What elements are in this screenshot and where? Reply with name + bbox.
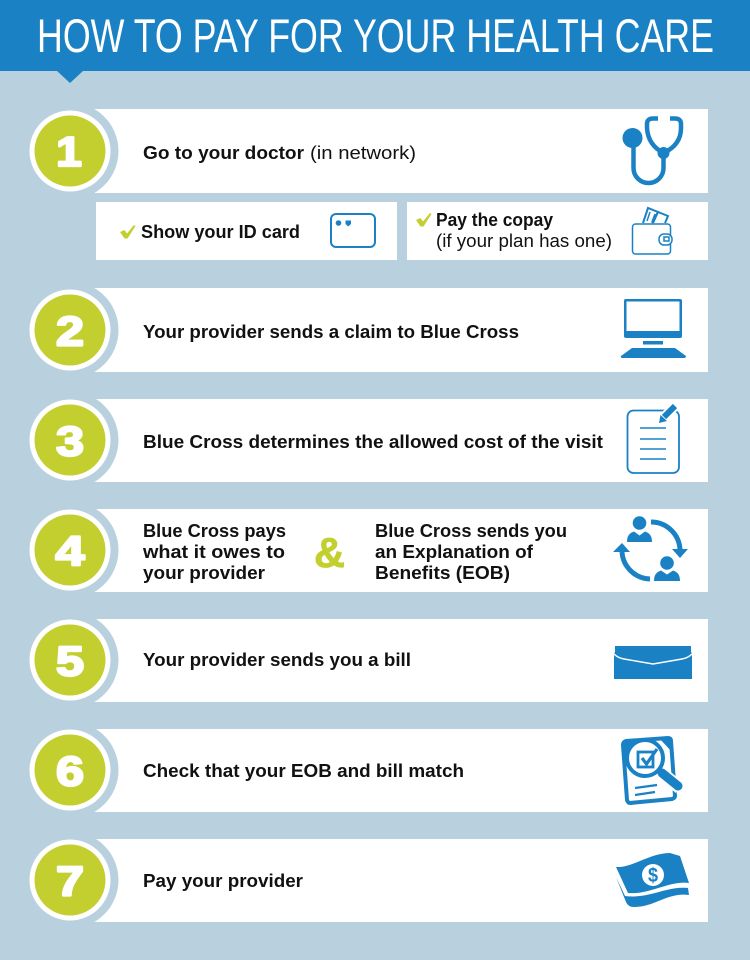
step 1 note: (in network) bbox=[310, 143, 416, 163]
step 4 left text: what it owes to bbox=[142, 542, 285, 562]
sub panel: show ID card bbox=[96, 202, 397, 260]
step 1 text: Go to your doctor bbox=[143, 143, 304, 163]
checkmark bbox=[416, 213, 432, 226]
number 1: 1 bbox=[56, 129, 82, 176]
icon: stethoscope bbox=[622, 118, 681, 183]
sub panel text: Show your ID card bbox=[141, 222, 300, 242]
number 6: 6 bbox=[56, 747, 84, 795]
number 7: 7 bbox=[56, 857, 84, 905]
header banner bbox=[0, 0, 750, 83]
step 2 text: Your provider sends a claim to Blue Cross bbox=[143, 322, 519, 342]
step 4 right text: Blue Cross sends you bbox=[375, 521, 567, 541]
icon: envelope bbox=[614, 646, 692, 679]
step 4 left text bbox=[142, 521, 286, 583]
step 7 text: Pay your provider bbox=[143, 871, 303, 891]
step 4 right text bbox=[375, 521, 567, 583]
icon: money bills: $ bbox=[648, 865, 658, 887]
step 3 text: Blue Cross determines the allowed cost of the visit bbox=[143, 432, 603, 452]
number 4: 4 bbox=[55, 528, 85, 575]
number 3: 3 bbox=[56, 417, 84, 465]
checkmark bbox=[120, 225, 136, 238]
icon: wallet bbox=[632, 208, 672, 254]
step 5 panel bbox=[22, 612, 708, 708]
icon: document and pencil bbox=[628, 406, 679, 473]
icon: people exchange cycle bbox=[613, 516, 688, 581]
number 2: 2 bbox=[56, 307, 84, 355]
step 4 panel bbox=[22, 502, 708, 598]
icon: document under magnifier bbox=[623, 738, 680, 803]
icon: money bills bbox=[616, 853, 689, 907]
number 5: 5 bbox=[56, 637, 84, 685]
step 2 panel bbox=[22, 282, 708, 378]
step 6 text: Check that your EOB and bill match bbox=[143, 761, 464, 781]
sub panel note: (if your plan has one) bbox=[436, 231, 612, 251]
step 5 text: Your provider sends you a bill bbox=[143, 650, 411, 670]
step 3 panel bbox=[22, 392, 708, 488]
step 4 left text: your provider bbox=[143, 563, 265, 583]
step 7 panel bbox=[22, 832, 708, 928]
step 4 right text: Benefits (EOB) bbox=[375, 563, 510, 583]
step 6 panel bbox=[22, 722, 708, 818]
icon: computer bbox=[621, 299, 686, 358]
sub panel heading: Pay the copay bbox=[436, 210, 553, 230]
icon: ID card bbox=[331, 214, 375, 247]
ampersand: & bbox=[314, 529, 345, 576]
step 4 left text: Blue Cross pays bbox=[143, 521, 286, 541]
sub panel: pay the copay bbox=[407, 202, 708, 260]
step 1 panel bbox=[22, 102, 708, 200]
step 4 right text: an Explanation of bbox=[375, 542, 534, 562]
